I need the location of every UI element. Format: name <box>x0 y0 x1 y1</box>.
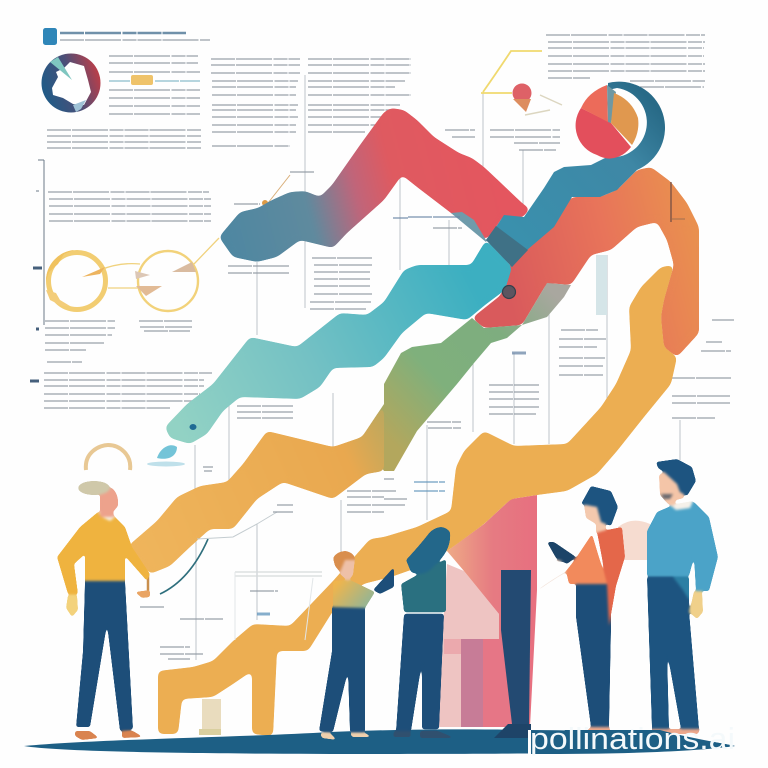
icons: arc and dome <box>86 445 213 471</box>
figure: small person <box>319 551 375 740</box>
pie chart: top left <box>42 54 100 112</box>
icon: header badge <box>43 28 57 45</box>
pink column with bars <box>437 495 537 727</box>
ribbon: orange upper <box>128 404 384 574</box>
sweater <box>333 580 375 608</box>
collar <box>670 501 693 510</box>
text block: right of center <box>384 217 734 505</box>
text block: beside pie <box>109 56 200 114</box>
ribbon: orange lower <box>158 265 677 736</box>
figure: man in yellow sweater <box>57 481 150 740</box>
bar: rose <box>483 639 511 727</box>
guide lines <box>195 75 680 660</box>
ribbon: red to slate <box>219 108 530 262</box>
annotation: first ribbon <box>234 172 315 206</box>
figure: woman with tablet <box>538 486 625 735</box>
icon: blue dome <box>157 445 177 459</box>
ring right <box>135 251 198 311</box>
text block: lower left <box>44 373 212 408</box>
bar: pale pink <box>444 639 461 654</box>
shoes <box>320 733 372 740</box>
ground ellipse <box>24 729 735 754</box>
callout: small red bulb with connector <box>481 51 562 115</box>
face <box>584 503 606 533</box>
pale blue column <box>596 255 607 315</box>
figure: person from behind <box>373 527 455 738</box>
lower chart annotations <box>140 482 445 659</box>
rings diagram <box>46 238 219 311</box>
annotation on coral ribbon <box>671 182 685 222</box>
shoes <box>393 731 455 738</box>
pink shape <box>447 495 537 727</box>
heading underline text <box>60 39 210 41</box>
legs <box>501 570 531 724</box>
pants <box>396 614 444 731</box>
pants <box>647 577 699 729</box>
shoe <box>652 729 700 734</box>
text block: large left <box>48 192 211 221</box>
pie chart: top right <box>576 85 638 159</box>
bar: mauve <box>461 639 483 727</box>
ribbon: slate fold <box>451 212 494 242</box>
figure: man in blue sweater <box>647 459 718 734</box>
text block: top right <box>546 35 705 87</box>
heading bar (illegible title) <box>60 32 186 34</box>
watermark: pollinations: pollinations.ai <box>530 721 735 756</box>
arm <box>373 567 394 594</box>
collar <box>98 512 115 521</box>
hair <box>406 527 450 574</box>
text block: under rings <box>45 321 192 362</box>
sweater shadow <box>673 577 689 600</box>
small label <box>203 467 213 471</box>
ribbon: coral arm over orange <box>657 222 699 357</box>
header: title block <box>43 28 210 45</box>
ribbon: coral <box>472 167 699 357</box>
hair <box>656 459 696 496</box>
hair <box>78 481 110 495</box>
callout: yellow tag <box>131 75 153 85</box>
ribbon: teal <box>165 240 512 444</box>
peach arc behind figures <box>618 521 650 560</box>
text: mid labels <box>228 130 560 512</box>
ring left <box>46 250 106 310</box>
tablet <box>547 542 576 564</box>
connector lines <box>538 561 566 590</box>
curved connector lines <box>148 512 277 594</box>
head <box>340 558 355 581</box>
sweater <box>647 502 718 591</box>
ribbon: dark teal ring and body <box>486 82 665 267</box>
axis line <box>36 160 44 325</box>
sweater <box>401 559 446 612</box>
pants <box>576 584 611 727</box>
icon: teal tail dot <box>190 424 196 430</box>
pants <box>76 581 133 731</box>
text block: under pie <box>47 130 202 148</box>
small labels: left <box>30 268 42 381</box>
pale shape <box>437 564 510 727</box>
hair <box>333 551 355 572</box>
mouth <box>661 494 673 499</box>
shoes <box>75 731 143 740</box>
sweater <box>57 512 150 594</box>
shoe <box>494 724 531 738</box>
other hand <box>135 590 150 598</box>
ribbon overlap shade <box>486 226 528 267</box>
icon: tan arc <box>86 445 130 470</box>
back arm <box>597 527 625 626</box>
hand <box>689 591 703 619</box>
marker: dark badge <box>502 286 516 298</box>
torso <box>566 534 607 584</box>
scale pedestal <box>199 699 221 735</box>
pants <box>319 607 365 732</box>
face <box>659 472 684 506</box>
text block: top middle columns <box>211 59 411 146</box>
neck and head <box>100 488 118 517</box>
shoe <box>582 727 612 735</box>
hand <box>66 595 78 617</box>
ribbon: green olive <box>362 283 571 471</box>
figure: tall legs <box>494 570 531 738</box>
connector lines <box>100 238 219 288</box>
hair <box>581 486 618 526</box>
